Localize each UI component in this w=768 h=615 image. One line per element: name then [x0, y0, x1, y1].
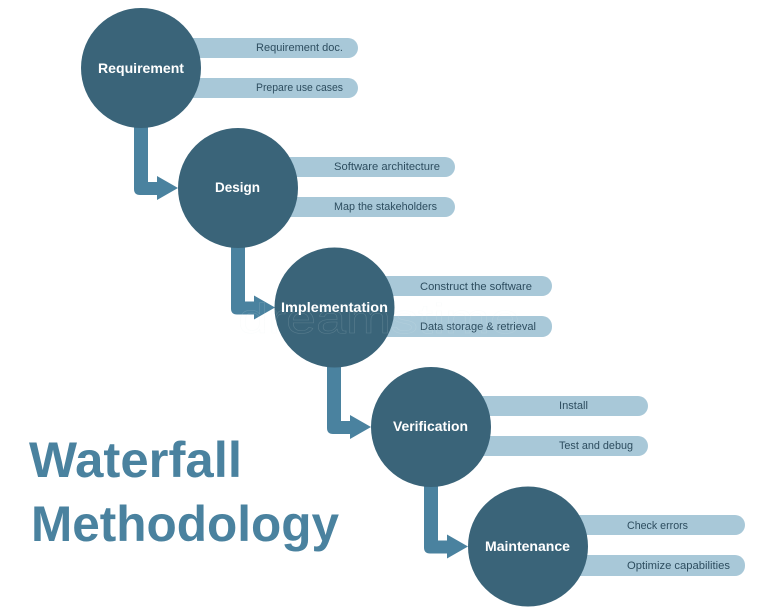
- task bar: test and debug: [460, 436, 648, 456]
- step: implementation: [274, 248, 552, 368]
- watermark: dreamstime: [238, 295, 520, 342]
- arrow: implementation to verification: [327, 364, 371, 439]
- title: Methodology: [31, 496, 339, 552]
- circle: requirement: [81, 8, 201, 128]
- circle: verification: Verification: [393, 418, 468, 434]
- task bar: install: Install: [559, 400, 588, 412]
- task bar: map the stakeholders: Map the stakeholders: [334, 201, 437, 213]
- arrow: requirement to design: [134, 125, 178, 200]
- task bar: check errors: [557, 515, 745, 535]
- circle: maintenance: [468, 486, 588, 606]
- task bar: check errors: Check errors: [627, 520, 688, 532]
- task bar: install: [460, 396, 648, 416]
- circle: design: [178, 128, 298, 248]
- task bar: software architecture: Software architecture: [334, 161, 440, 173]
- task bar: map the stakeholders: [267, 197, 455, 217]
- task bar: optimize capabilities: [557, 555, 745, 576]
- circle: design: Design: [215, 179, 260, 195]
- circle: verification: [371, 367, 491, 487]
- task bar: prepare use cases: Prepare use cases: [256, 82, 343, 94]
- task bar: requirement doc: [170, 38, 358, 58]
- task bar: optimize capabilities: Optimize capabilities: [627, 560, 731, 572]
- title: Waterfall: [29, 432, 242, 488]
- step: verification: [371, 367, 648, 487]
- step: maintenance: [468, 486, 745, 606]
- circle: implementation: [274, 248, 394, 368]
- arrow: design to implementation: [231, 245, 275, 320]
- circle: maintenance: Maintenance: [485, 538, 570, 554]
- circle: implementation: Implementation: [281, 299, 388, 315]
- task bar: test and debug: Test and debug: [559, 440, 633, 452]
- task bar: requirement doc: Requirement doc.: [256, 42, 343, 54]
- task bar: data storage and retrieval: Data storage & retrieval: [420, 321, 536, 333]
- step: requirement: [81, 8, 358, 128]
- task bar: prepare use cases: [170, 78, 358, 98]
- title: [29, 432, 339, 552]
- task bar: construct the software: Construct the software: [420, 281, 532, 293]
- task bar: data storage and retrieval: [364, 316, 552, 337]
- step: design: [178, 128, 455, 248]
- circle: requirement: Requirement: [98, 60, 184, 76]
- task bar: construct the software: [364, 276, 552, 296]
- arrow: verification to maintenance: [424, 484, 468, 558]
- task bar: software architecture: [267, 157, 455, 177]
